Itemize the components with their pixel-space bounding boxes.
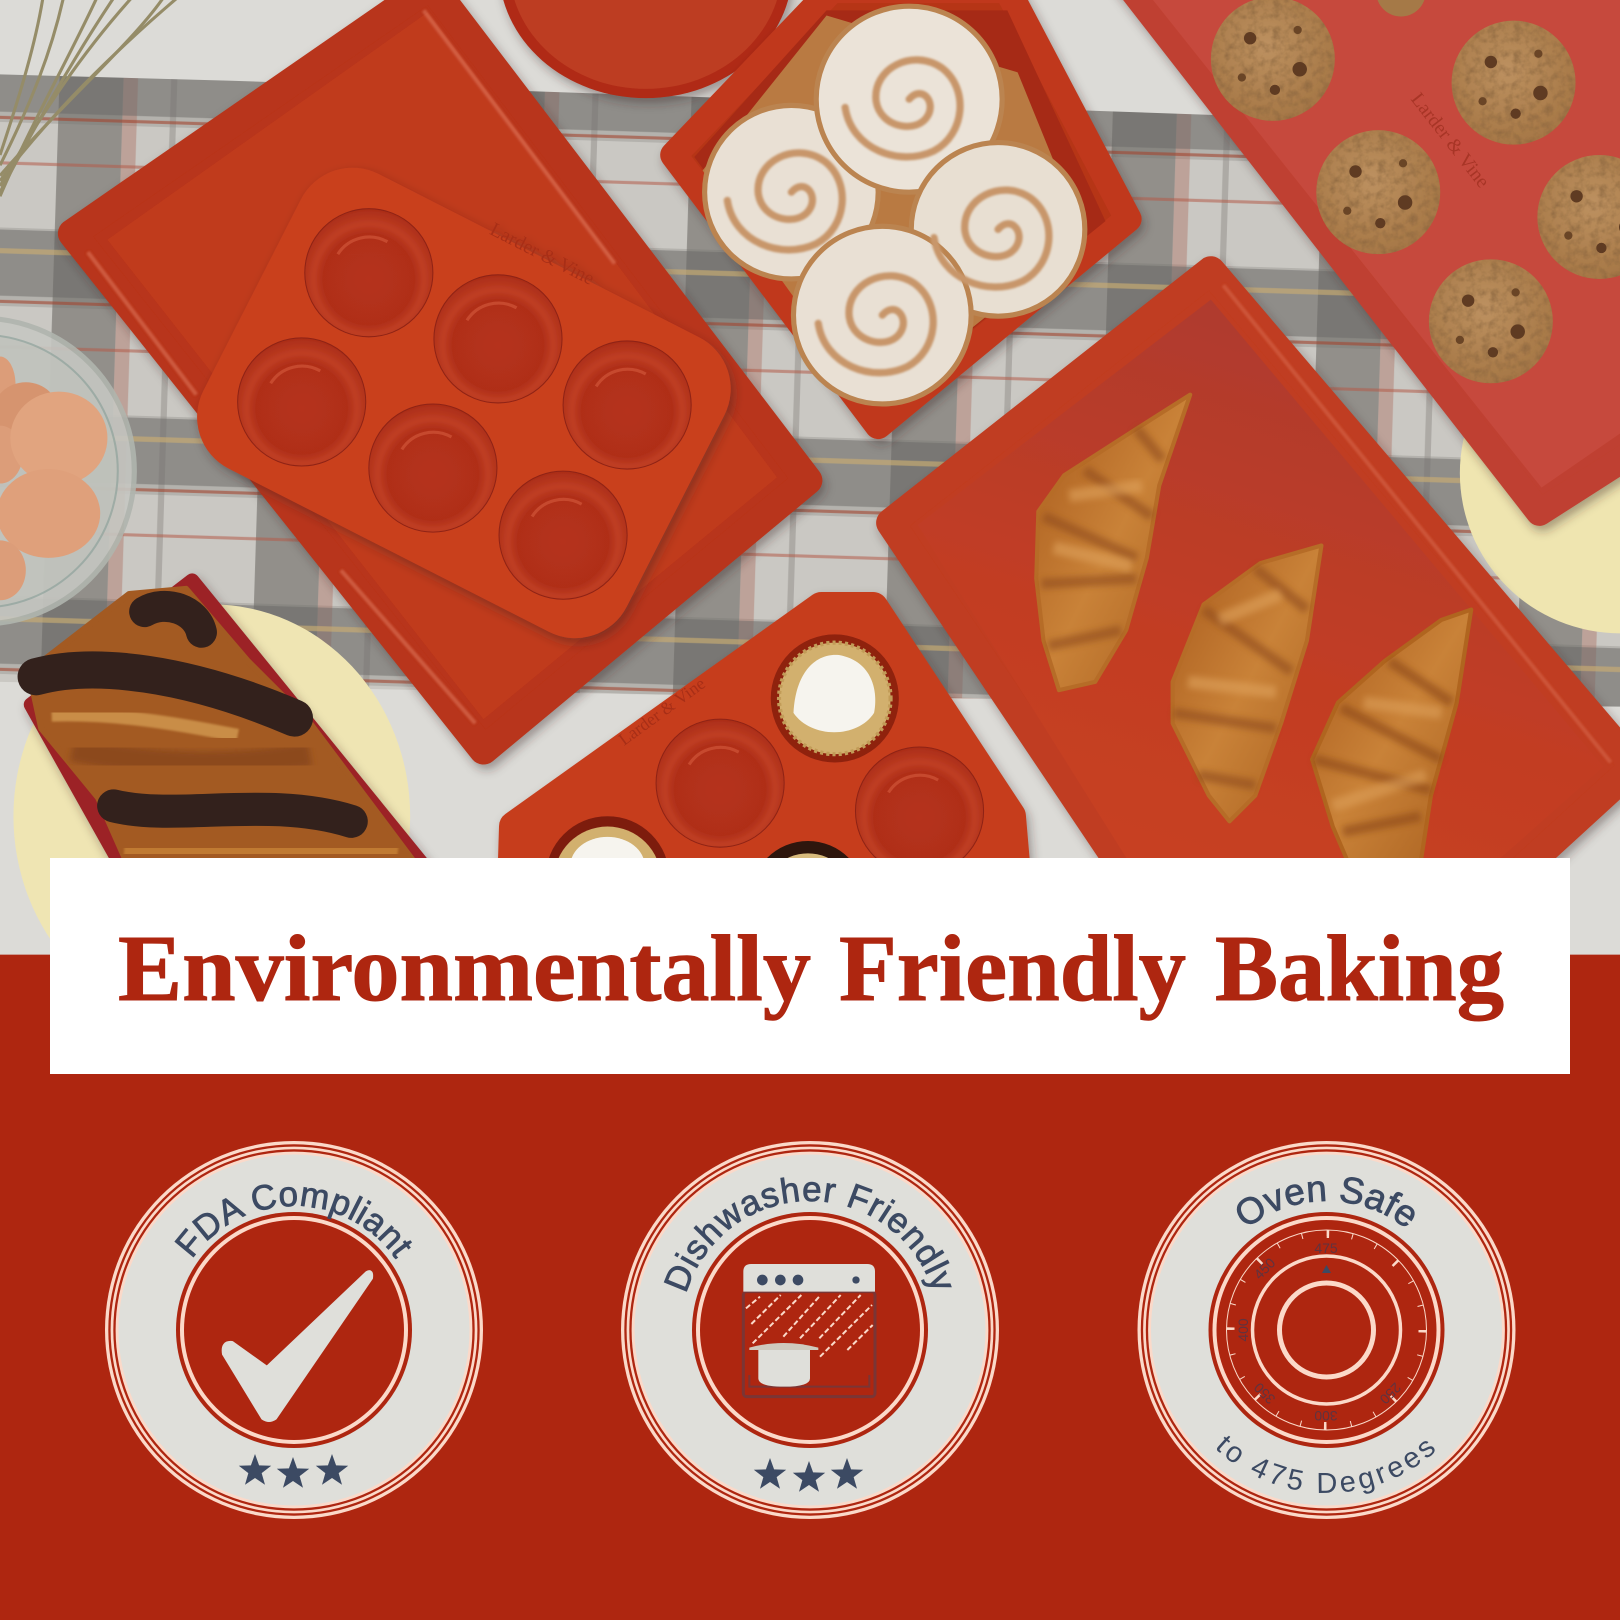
icon: temperature dial: 300 [1314, 1408, 1338, 1424]
heading: Friendly [839, 917, 1186, 1021]
banner card and title text [50, 858, 1570, 1074]
red lower background [0, 955, 1620, 1620]
cinnamon rolls [703, 6, 1085, 404]
icon: temperature dial [1226, 1230, 1426, 1430]
icon: check mark [224, 1272, 371, 1420]
icon: temperature dial: 250 [1376, 1380, 1404, 1408]
cupcakes [546, 634, 899, 957]
plaid tablecloth [0, 74, 1620, 707]
cookie sheet pan [1124, 0, 1620, 512]
icon: three stars [754, 1458, 863, 1492]
heading: Environmentally [118, 917, 811, 1021]
icon: temperature dial: 475 [1314, 1240, 1338, 1256]
large sheet pan [72, 0, 808, 750]
badge: FDA Compliant [105, 1141, 483, 1519]
badge: Oven Safe [1138, 1141, 1516, 1519]
icon: dishwasher with pot and spray [743, 1264, 875, 1397]
badge label top: Oven Safe [1236, 1177, 1415, 1226]
badge label: FDA Compliant [174, 1184, 412, 1260]
badge: Dishwasher Friendly [621, 1141, 999, 1519]
icon: temperature dial: 450 [1251, 1254, 1279, 1282]
badge label bottom: to 475 Degrees [1217, 1436, 1435, 1494]
icon: temperature dial: 350 [1250, 1379, 1278, 1407]
glass bowl with eggs [0, 318, 134, 624]
cream trivet, right [1460, 313, 1620, 633]
embossed logo on muffin tin: Larder & Vine [486, 219, 598, 290]
loaf pan with braided chocolate bread [29, 581, 434, 889]
croissant baking sheet [891, 271, 1620, 1033]
embossed logo on cookie sheet: Larder & Vine [1406, 89, 1493, 192]
braided bread [29, 589, 418, 868]
badge label: Dishwasher Friendly [664, 1177, 952, 1292]
background: light table surface [0, 0, 1620, 961]
icon: temperature dial: 400 [1235, 1318, 1251, 1342]
muffin tin with six empty cups [177, 148, 751, 658]
cream trivet, left [13, 604, 410, 1028]
cookies [1211, 0, 1620, 383]
muffin tin with cupcakes [510, 608, 1023, 961]
icon: three stars [239, 1454, 348, 1488]
embossed logo on muffin tin: Larder & Vine [615, 673, 709, 749]
whisk [0, 0, 181, 196]
heading [118, 917, 1504, 1021]
croissants [1036, 395, 1471, 863]
round cake pan [499, 0, 792, 98]
heading: Baking [1215, 917, 1504, 1021]
square pan with cinnamon rolls [674, 0, 1128, 426]
